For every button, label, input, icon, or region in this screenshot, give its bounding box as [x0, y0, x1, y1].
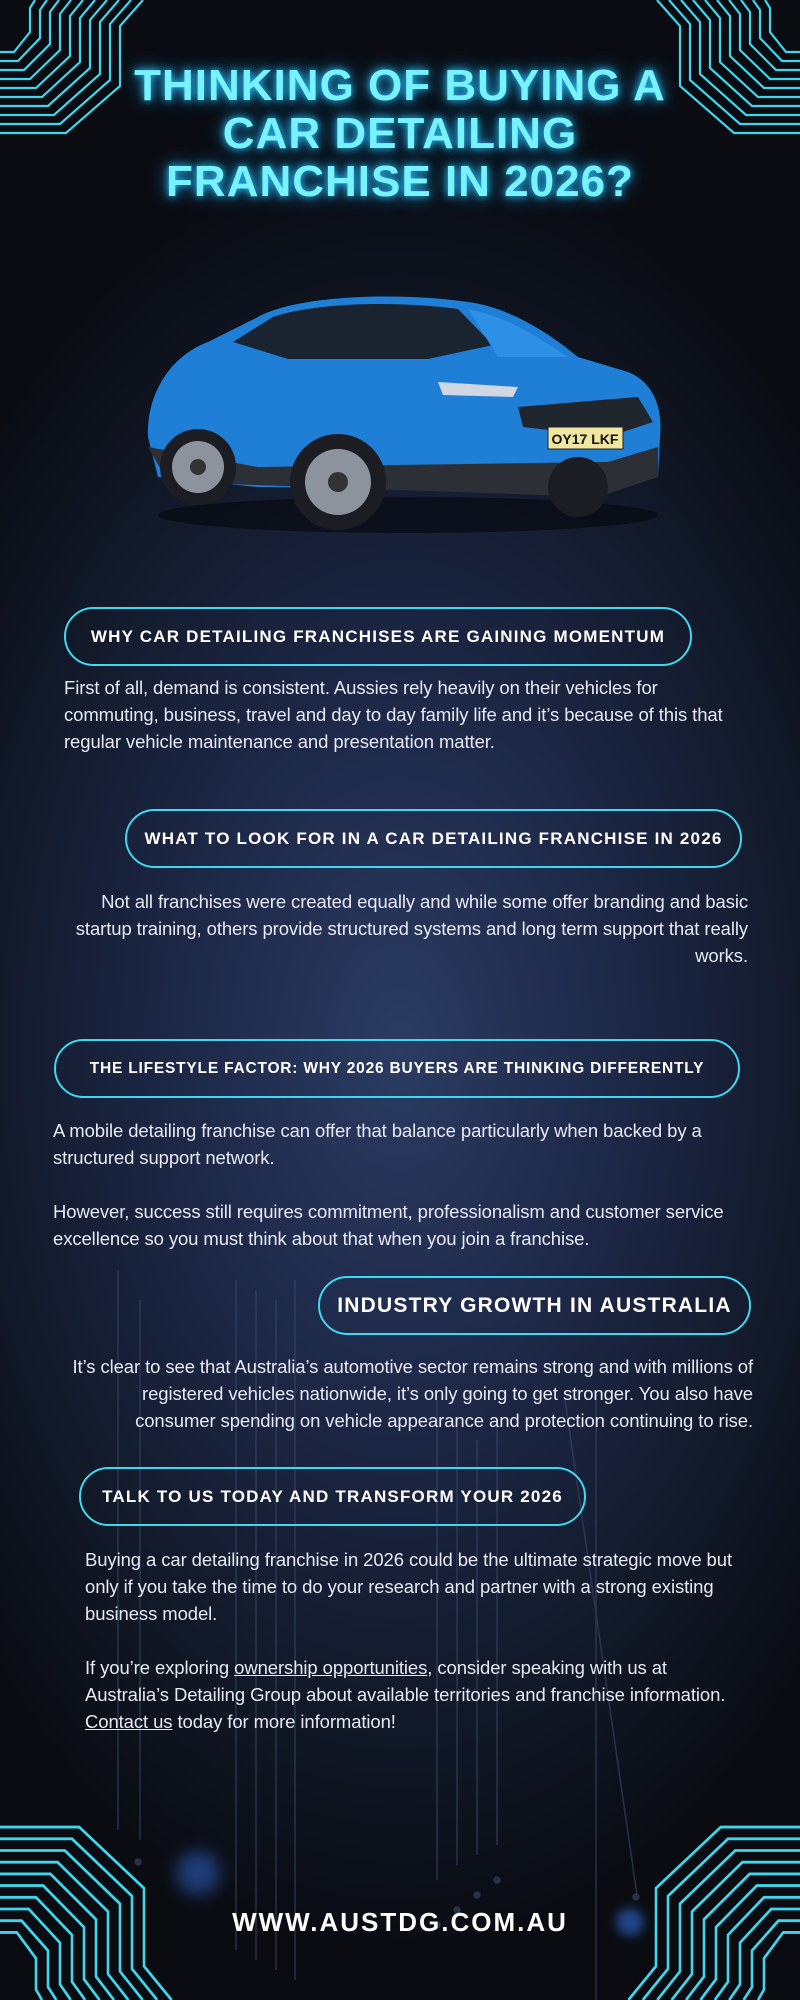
section 1 heading: [64, 607, 692, 666]
title: [126, 56, 674, 209]
website url: WWW.AUSTDG.COM.AU: [232, 1907, 568, 1937]
car illustration: OY17 LKF: [552, 431, 619, 447]
section 1 text: First of all, demand is consistent. Aussies rely heavily on their vehicles for commuting, business, travel and day to day family life and it’s because of this that regular vehicle maintenance and presentation matter.: [64, 677, 723, 752]
title: CAR DETAILING: [223, 109, 577, 158]
section 4 heading: INDUSTRY GROWTH IN AUSTRALIA: [337, 1294, 732, 1316]
section 2 heading: WHAT TO LOOK FOR IN A CAR DETAILING FRANCHISE IN 2026: [144, 828, 723, 848]
section 3 text: [53, 1120, 724, 1249]
section 1 heading: WHY CAR DETAILING FRANCHISES ARE GAINING MOMENTUM: [91, 626, 665, 646]
section 5 text: [85, 1549, 732, 1732]
section 3 text: However, success still requires commitment, professionalism and customer service excellence so you must think about that when you join a franchise.: [53, 1201, 724, 1249]
title: FRANCHISE IN 2026?: [166, 157, 634, 206]
section 5 heading: [79, 1467, 586, 1526]
car illustration: [148, 296, 660, 533]
section 4 heading: [318, 1276, 751, 1335]
section 4 text: It’s clear to see that Australia’s automotive sector remains strong and with millions of registered vehicles nationwide, it’s only going to get stronger. You also have consumer spending on vehicle appearance and protection continuing to rise.: [73, 1356, 753, 1431]
title: THINKING OF BUYING A: [134, 61, 666, 110]
section 2 text: Not all franchises were created equally and while some offer branding and basic startup training, others provide structured systems and long term support that really works.: [76, 891, 748, 966]
section 5 heading: TALK TO US TODAY AND TRANSFORM YOUR 2026: [102, 1486, 563, 1506]
section 2 heading: [125, 809, 742, 868]
section 3 text: A mobile detailing franchise can offer that balance particularly when backed by a structured support network.: [53, 1120, 702, 1168]
section 3 heading: THE LIFESTYLE FACTOR: WHY 2026 BUYERS ARE THINKING DIFFERENTLY: [90, 1060, 704, 1076]
section 3 heading: [54, 1039, 740, 1098]
section 5 text: Buying a car detailing franchise in 2026 could be the ultimate strategic move but only if you take the time to do your research and partner with a strong existing business model.: [85, 1549, 732, 1624]
section 5 text: If you’re exploring ownership opportunities, consider speaking with us at Australia’s Detailing Group about available territories and franchise information. Contact us today for more information!: [85, 1657, 725, 1732]
